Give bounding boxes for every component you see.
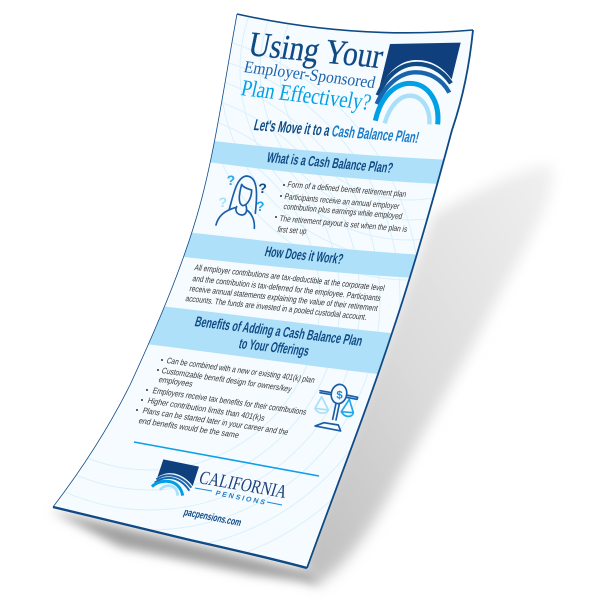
title: Plan Effectively? xyxy=(239,74,374,115)
bullet list: benefits: Higher contribution limits than 401(k)s xyxy=(146,395,267,423)
icon: confused woman: ? xyxy=(219,194,227,210)
paragraph: and the contribution is tax-deferred for the employee. Participants xyxy=(191,273,382,303)
heading: benefits xyxy=(193,314,364,360)
heading: benefits: Benefits of Adding a Cash Balance Plan xyxy=(193,314,364,350)
header rainbow graphic xyxy=(375,43,461,124)
bullet list: what is: The retirement payout is set when the plan is xyxy=(278,213,409,234)
icon: scales with dollar xyxy=(315,383,358,431)
title: Using Your xyxy=(245,25,387,76)
heading: what is: What is a Cash Balance Plan? xyxy=(265,150,395,177)
logo: PENSIONS xyxy=(214,490,266,506)
paper edges xyxy=(53,14,473,568)
bullet list: what is xyxy=(275,179,409,236)
bullet list: what is: first set up xyxy=(277,224,308,236)
paragraph xyxy=(184,262,386,322)
paper sheet xyxy=(58,15,472,566)
heading: benefits: to Your Offerings xyxy=(237,336,311,360)
logo xyxy=(152,459,290,506)
bullet list: benefits: Customizable benefit design for owners/key xyxy=(160,365,294,394)
subtitle: Let's Move it to a Cash Balance Plan! xyxy=(252,116,421,147)
icon: confused woman: ? xyxy=(258,180,267,196)
bullet list: benefits: end benefits would be the same xyxy=(137,415,241,440)
icon: scales with dollar: $ xyxy=(336,389,343,401)
bullet list: what is: Participants receive an annual employer xyxy=(283,191,401,211)
icon: confused woman: ? xyxy=(227,172,235,188)
bullet list: benefits xyxy=(136,355,317,440)
bullet list: benefits: employees xyxy=(157,374,194,389)
divider line xyxy=(134,442,319,476)
bullet list: benefits: Plans can be started later in your career and the xyxy=(141,405,290,437)
logo mark xyxy=(152,459,199,496)
title: Employer-Sponsored xyxy=(242,57,378,92)
logo wordmark: CALIFORNIA xyxy=(196,468,290,503)
bullet list: benefits: Can be combined with a new or existing 401(k) plan xyxy=(165,355,317,385)
icon: confused woman xyxy=(216,172,267,228)
paragraph: accounts. The funds are invested in a pooled custodial account. xyxy=(184,293,368,322)
paragraph: All employer contributions are tax-deductible at the corporate level xyxy=(193,262,386,293)
bullet list: what is: contribution plus earnings while employed xyxy=(282,201,404,221)
title xyxy=(239,25,387,115)
section bands xyxy=(130,140,450,374)
heading: how does it work: How Does it Work? xyxy=(263,244,345,268)
paper shadow xyxy=(50,165,553,585)
website url: pacpensions.com xyxy=(182,507,243,529)
bullet list: benefits: Employers receive tax benefits for their contributions xyxy=(151,385,308,417)
paragraph: receive annual statements explaining the value of their retirement xyxy=(188,283,380,313)
icon: confused woman: ? xyxy=(256,198,265,214)
bullet list: what is: Form of a defined benefit retirement plan xyxy=(286,179,408,199)
